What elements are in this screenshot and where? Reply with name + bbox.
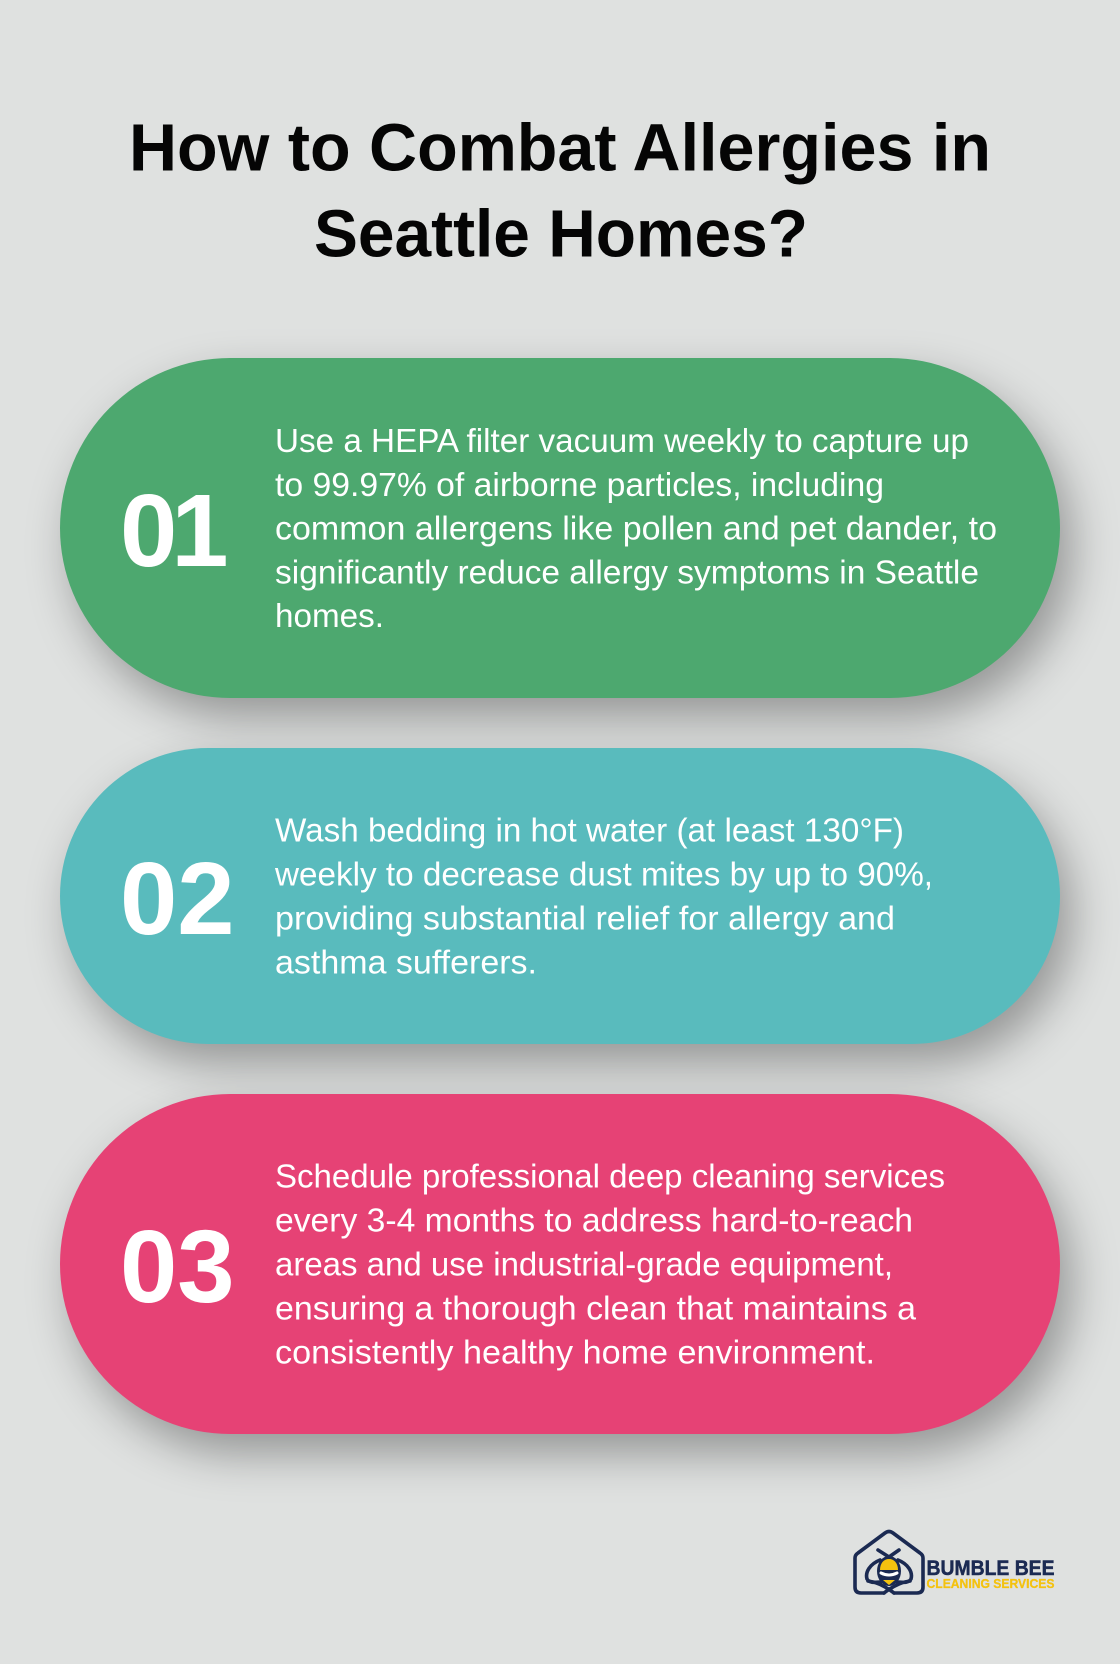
number 02: 02 — [120, 841, 235, 956]
text block: step 03: ensuring a thorough clean that maintains a — [275, 1291, 916, 1328]
text block: step 01: to 99.97% of airborne particles, including — [275, 467, 884, 504]
title: How to Combat Allergies in — [129, 110, 991, 186]
title — [129, 110, 991, 272]
panel: step 02 — [60, 748, 1060, 1044]
panel: step 03 — [60, 1094, 1060, 1434]
title: Seattle Homes? — [314, 196, 808, 272]
tagline: CLEANING SERVICES — [926, 1576, 1055, 1591]
text block: step 02: providing substantial relief for allergy and — [275, 901, 895, 938]
text block: step 02: asthma sufferers. — [275, 945, 537, 982]
number 01: 01 — [120, 473, 229, 588]
text block: step 03 — [275, 1159, 945, 1372]
text block: step 01: common allergens like pollen and pet dander, to — [275, 511, 997, 548]
text block: step 01: homes. — [275, 598, 384, 635]
text block: step 01: significantly reduce allergy symptoms in Seattle — [275, 554, 979, 591]
text block: step 01: Use a HEPA filter vacuum weekly to capture up — [275, 423, 969, 460]
text block: step 03: consistently healthy home environment. — [275, 1335, 875, 1372]
text block: step 02: weekly to decrease dust mites by up to 90%, — [274, 857, 933, 894]
text block: step 02 — [274, 813, 933, 982]
text block: step 03: Schedule professional deep cleaning services — [275, 1159, 945, 1196]
icon: house with bee — [855, 1532, 923, 1593]
logo: Bumble Bee Cleaning Services — [855, 1532, 1055, 1593]
text block: step 01 — [275, 423, 997, 635]
wordmark: BUMBLE BEE — [926, 1557, 1054, 1580]
panel: step 01 — [60, 358, 1060, 698]
text block: step 02: Wash bedding in hot water (at least 130°F) — [275, 813, 904, 850]
pill background: teal — [60, 748, 1060, 1044]
pill background: green — [60, 358, 1060, 698]
text block: step 03: every 3-4 months to address hard-to-reach — [275, 1203, 913, 1240]
pill background: pink — [60, 1094, 1060, 1434]
text block: step 03: areas and use industrial-grade equipment, — [275, 1247, 893, 1284]
number 03: 03 — [120, 1209, 235, 1324]
